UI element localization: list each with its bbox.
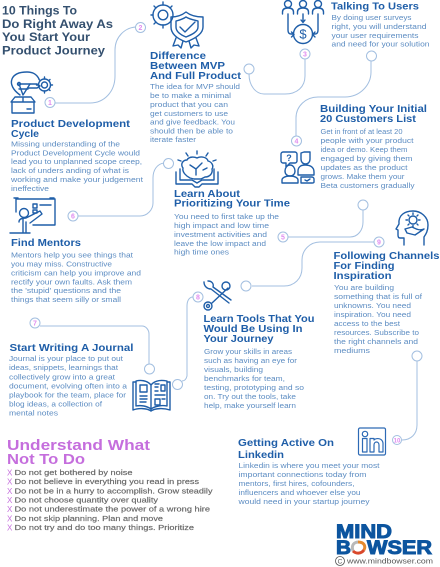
panel: difference between MVP and full product: And Full Product [150, 71, 242, 82]
icon: linkedin [358, 428, 386, 455]
list: things not to do: X [7, 478, 13, 486]
panel: find mentors [11, 238, 141, 304]
list: things not to do: Do not believe in everything you read in press [14, 479, 200, 486]
panel: talking to users: and need for your solution [332, 42, 430, 48]
panel: find mentors: Mentors help you see things that [11, 252, 133, 260]
panel: following channels for finding inspiration: resources. Subscribe to [334, 330, 419, 337]
panel: building your initial 20 customers list: Beta customers gradually [320, 183, 415, 190]
panel: learn tools: such as having an eye for [204, 358, 298, 365]
panel: learn about prioritizing your time: Prioritizing Your Time [174, 198, 291, 210]
panel: product development cycle: working and make your judgement [10, 177, 143, 184]
panel: following channels for finding inspiration [334, 251, 440, 355]
panel: following channels for finding inspiration: the right channels and [334, 339, 418, 346]
title: Do Right Away As [2, 17, 113, 31]
panel: learn tools: benchmarks for team, [204, 376, 285, 383]
panel: getting active on linkedin: important connections today from [238, 472, 367, 479]
icon: customers chat [281, 152, 314, 183]
icon: question mark: ? [286, 153, 292, 163]
panel: learn tools: Grow your skills in areas [204, 349, 293, 356]
panel: learn about prioritizing your time: high time ones [174, 250, 230, 256]
panel: building your initial 20 customers list [320, 104, 427, 190]
title [2, 4, 113, 58]
list: things not to do: X [7, 524, 13, 532]
panel: difference between MVP and full product: Between MVP [150, 61, 226, 72]
panel: find mentors: criticism can help you improve and [11, 270, 141, 278]
panel: find mentors: things that seem silly or small [11, 297, 122, 304]
title: 10 Things To [2, 4, 77, 18]
logo: mindbowser: C [338, 558, 343, 566]
panel: understand what not to do [7, 438, 213, 532]
logo: mindbowser: MIND [336, 522, 392, 543]
panel: product development cycle: Product Development Cycle would [11, 150, 140, 158]
panel: difference between MVP and full product: product that you can [150, 102, 228, 109]
connector 6 [68, 158, 174, 221]
panel: learn about prioritizing your time: investment activities and [174, 232, 267, 239]
icon: whiteboard [10, 198, 55, 233]
panel: start writing a journal: playbook for the team, place for [9, 392, 127, 400]
connector 10: 10 [394, 438, 401, 444]
list: things not to do: Do not try and do too many things. Prioritize [14, 525, 194, 532]
panel: difference between MVP and full product: The idea for MVP should [150, 84, 240, 91]
panel: building your initial 20 customers list: grows. Make them your [320, 174, 405, 181]
panel: following channels for finding inspiration: access to the best [334, 321, 400, 328]
panel: following channels for finding inspiration: something that is full of [334, 294, 422, 301]
icon: bulb, gear and box [11, 72, 52, 113]
panel: learn tools: Your Journey [204, 334, 274, 345]
connector 1 to 2: 1 [48, 100, 52, 107]
list: things not to do: Do not get bothered by noise [14, 470, 133, 477]
connector 8: 8 [196, 294, 200, 302]
panel: learn tools: visuals, building [204, 367, 263, 374]
panel: product development cycle: Cycle [11, 129, 40, 140]
panel: product development cycle: Missing understanding of the [11, 142, 120, 148]
connector 9: 9 [377, 240, 381, 246]
list: things not to do: Do not underestimate the power of a wrong hire [14, 506, 210, 514]
panel: getting active on linkedin [237, 438, 380, 506]
connector 7 [30, 318, 154, 374]
panel: building your initial 20 customers list: idea or demo. Keep them [320, 147, 408, 154]
heading: understand what not to do: Understand What [7, 438, 150, 454]
panel: learn tools: testing, prototyping and so [204, 385, 304, 392]
connector 8 [172, 292, 203, 390]
panel: start writing a journal: document, evolving often into a [9, 384, 127, 390]
connector 5: 5 [281, 234, 285, 242]
logo: mindbowser: www.mindbowser.com [346, 556, 433, 566]
list: things not to do: Do not skip planning. Plan and move [14, 516, 163, 523]
panel: learn tools: help, make yourself learn [204, 403, 296, 410]
list: things not to do: Do not choose quantity over quality [14, 498, 159, 504]
panel: getting active on linkedin: Linkedin is where you meet your most [238, 463, 380, 470]
panel: difference between MVP and full product: should then be able to [150, 128, 233, 136]
panel: following channels for finding inspiration: unknowns. You need [334, 303, 411, 310]
logo: mindbowser: WSER [367, 538, 432, 559]
panel: getting active on linkedin: Getting Active On [238, 438, 334, 449]
panel: following channels for finding inspiration: Following Channels [334, 251, 440, 262]
panel: building your initial 20 customers list: people with your product [320, 138, 414, 145]
panel: following channels for finding inspiration: Inspiration [334, 271, 392, 282]
connector 1 to 2: 2 [139, 25, 143, 32]
panel: find mentors: the 'stupid' questions and the [11, 288, 121, 295]
icon: head with idea [396, 211, 428, 245]
panel: difference between MVP and full product: and give feedback. You [150, 120, 235, 126]
panel: product development cycle: ineffective [11, 186, 49, 193]
panel: learn about prioritizing your time: high impact and low time [174, 223, 269, 230]
panel: product development cycle [10, 119, 143, 193]
panel: following channels for finding inspiration: You are building [334, 285, 394, 292]
panel: start writing a journal [9, 343, 134, 418]
connector 4: 4 [295, 138, 299, 146]
connector 3: 3 [303, 52, 307, 58]
panel: talking to users: Talking To Users [331, 2, 420, 12]
panel: difference between MVP and full product: get customers to use [150, 111, 228, 118]
panel: difference between MVP and full product: be to make a minimal [150, 93, 232, 100]
panel: difference between MVP and full product [150, 51, 242, 144]
panel: find mentors: you may miss. Constructive [11, 262, 112, 268]
panel: learn tools [204, 314, 315, 410]
panel: product development cycle: lack of unders anding of what is [11, 168, 130, 175]
panel: building your initial 20 customers list: Get in front of at least 20 [320, 129, 403, 136]
logo: mindbowser: B [336, 538, 351, 559]
connector 3 [244, 49, 310, 94]
panel: getting active on linkedin: mentors, first hires, cofounders, [238, 481, 355, 488]
title: You Start Your [2, 30, 90, 44]
list: things not to do: Do not be in a hurry to accomplish. Grow steadily [14, 488, 213, 496]
connector 9 [241, 237, 384, 291]
list: things not to do: X [7, 505, 13, 514]
panel: building your initial 20 customers list: engaged by giving them [320, 156, 413, 163]
panel: product development cycle: lead you to unplanned scope creep, [11, 159, 142, 166]
panel: start writing a journal: blog ideas, a collection of [9, 402, 102, 408]
panel: find mentors: Find Mentors [11, 238, 82, 249]
panel: learn tools: Learn Tools That You [204, 314, 315, 325]
list: things not to do: X [7, 496, 13, 505]
logo: mindbowser [336, 522, 433, 566]
panel: difference between MVP and full product: iterate faster [150, 137, 197, 144]
panel: following channels for finding inspiration: inspiration. You need [334, 312, 411, 319]
panel: start writing a journal: collectively grow into a great [9, 374, 115, 382]
icon: gears and shield [151, 2, 203, 48]
connector 4 [292, 51, 376, 146]
icon: crossed tools [204, 281, 231, 310]
panel: start writing a journal: ideas, snippets, learnings that [9, 365, 118, 372]
panel: following channels for finding inspiration: mediums [334, 348, 371, 355]
connector 10 [392, 351, 422, 444]
panel: start writing a journal: Start Writing A Journal [10, 343, 134, 354]
panel: talking to users: By doing user surveys [332, 15, 412, 22]
list: things not to do [7, 468, 213, 532]
panel: getting active on linkedin: influencers and whoever else you [238, 490, 361, 497]
panel: building your initial 20 customers list: updates as the product [320, 165, 408, 172]
panel: learn tools: on. Try out the tools, take [204, 394, 296, 401]
title: Product Journey [2, 44, 105, 58]
panel: building your initial 20 customers list: 20 Customers List [320, 114, 417, 125]
connector 6: 6 [71, 214, 75, 220]
panel: talking to users: right, you will understand [332, 24, 427, 31]
icon: dollar sign: $ [299, 26, 307, 42]
panel: learn tools: Would Be Using In [204, 324, 303, 335]
list: things not to do: X [7, 468, 13, 478]
panel: difference between MVP and full product: Difference [150, 51, 207, 62]
list: things not to do: X [7, 487, 13, 496]
connector 1 to 2 [45, 22, 146, 108]
connector 7: 7 [33, 320, 37, 328]
icon: users and dollar [282, 0, 324, 44]
panel: getting active on linkedin: Linkedin [238, 450, 284, 461]
panel: find mentors: rectify your own faults. Ask them [11, 280, 132, 286]
heading: understand what not to do [7, 438, 150, 468]
heading: understand what not to do: Not To Do [7, 452, 85, 468]
panel: learn about prioritizing your time: You need to first take up the [174, 214, 279, 221]
panel: start writing a journal: Journal is your place to put out [9, 356, 123, 363]
panel: learn about prioritizing your time [174, 189, 291, 256]
panel: product development cycle: Product Development [11, 119, 131, 130]
panel: learn about prioritizing your time: Learn About [174, 189, 241, 200]
panel: learn about prioritizing your time: leave the low impact and [174, 241, 266, 248]
panel: talking to users: your user requirements [332, 33, 419, 40]
panel: start writing a journal: mental notes [9, 410, 59, 418]
panel: building your initial 20 customers list: Building Your Initial [320, 104, 427, 115]
icon: open book [133, 380, 170, 411]
icon: brain on book [176, 151, 218, 187]
panel: getting active on linkedin: would need in your startup journey [237, 499, 370, 506]
panel: talking to users [331, 2, 430, 48]
list: things not to do: X [7, 514, 13, 524]
panel: following channels for finding inspiration: For Finding [334, 261, 395, 272]
connector 5 [278, 200, 368, 242]
